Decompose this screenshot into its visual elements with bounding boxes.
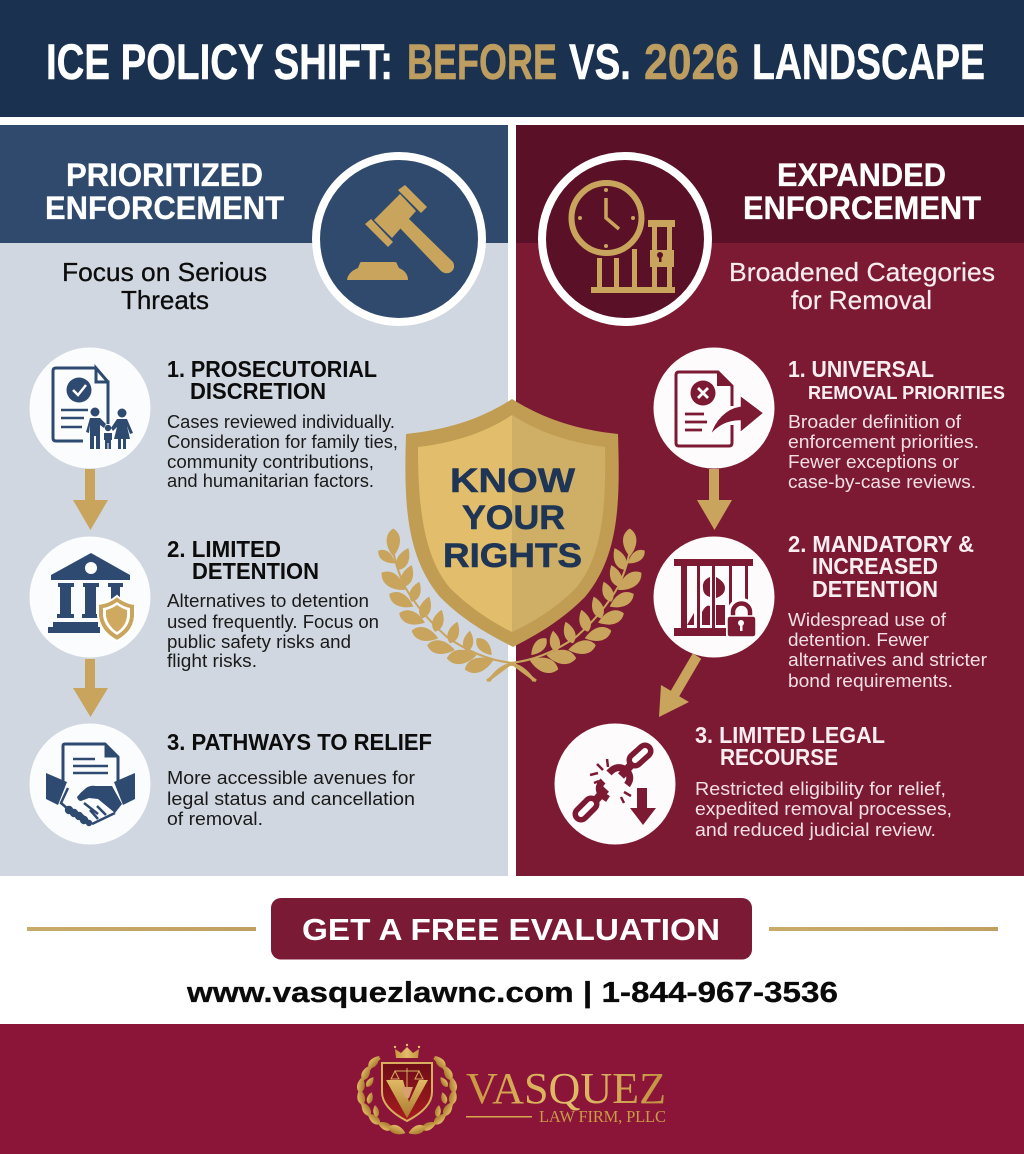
body text: alternatives and stricter <box>788 649 987 670</box>
body text: Consideration for family ties, <box>167 431 398 452</box>
heading: prioritized enforcement: PRIORITIZED <box>66 157 263 193</box>
icon: document and family <box>30 348 150 468</box>
heading: expanded enforcement <box>743 157 981 226</box>
body text: used frequently. Focus on <box>167 611 379 632</box>
body text: detention. Fewer <box>788 629 929 650</box>
icon: rejected document with arrow <box>654 348 774 468</box>
heading <box>167 356 377 404</box>
heading: 1. UNIVERSAL <box>788 356 934 382</box>
body text <box>695 778 952 840</box>
body text <box>788 609 987 691</box>
heading <box>788 356 1005 403</box>
subheading: broadened categories for removal: for Removal <box>791 285 932 315</box>
step 3: limited legal recourse <box>554 722 952 844</box>
heading: 2. LIMITED <box>167 536 281 562</box>
diagonal arrow <box>659 653 701 717</box>
body text: Alternatives to detention <box>167 590 369 611</box>
body text <box>167 767 415 829</box>
body text: bond requirements. <box>788 670 953 691</box>
laurel: left branch <box>375 528 536 681</box>
body text <box>788 411 979 492</box>
subheading: broadened categories for removal: Broadened Categories <box>729 257 995 287</box>
body text <box>167 590 379 671</box>
heading: prioritized enforcement <box>45 157 284 226</box>
step 2: limited detention <box>30 536 379 671</box>
logo <box>356 1044 666 1137</box>
icon: gavel <box>316 156 482 322</box>
heading: REMOVAL PRIORITIES <box>808 382 1005 403</box>
subheading: focus on serious threats: Threats <box>121 285 209 315</box>
heading <box>788 531 974 602</box>
body text: Restricted eligibility for relief, <box>695 778 946 799</box>
logo wordmark: VASQUEZ <box>466 1064 666 1113</box>
icon: clock and detention bars <box>542 156 708 322</box>
heading: prioritized enforcement: ENFORCEMENT <box>45 190 284 226</box>
arrow <box>73 469 108 530</box>
body text: Widespread use of <box>788 609 947 630</box>
body text: More accessible avenues for <box>167 767 415 788</box>
header banner <box>0 0 1024 117</box>
shield text <box>443 462 582 575</box>
heading <box>695 722 885 770</box>
step 3: pathways to relief <box>30 724 432 844</box>
body text: public safety risks and <box>167 631 351 652</box>
title: ICE POLICY SHIFT: <box>46 34 393 90</box>
call to action <box>27 898 998 1009</box>
step 1: universal removal priorities <box>654 348 1005 492</box>
shield text: KNOW <box>450 462 576 500</box>
subheading: focus on serious threats: Focus on Serious <box>62 257 267 287</box>
body text: case-by-case reviews. <box>788 471 976 492</box>
arrow <box>697 469 732 530</box>
title: BEFORE <box>407 34 557 90</box>
body text: expedited removal processes, <box>695 798 952 819</box>
heading: RECOURSE <box>720 744 838 770</box>
shield text: RIGHTS <box>443 537 582 575</box>
heading: DETENTION <box>812 576 938 602</box>
body text: community contributions, <box>167 451 374 472</box>
body text: Fewer exceptions or <box>788 451 959 472</box>
body text: of removal. <box>167 808 263 829</box>
body text: Broader definition of <box>788 411 962 432</box>
logo wordmark: LAW FIRM, PLLC <box>539 1107 666 1126</box>
heading: 1. PROSECUTORIAL <box>167 356 377 382</box>
heading <box>167 536 319 584</box>
icon: broken chain with down arrow <box>554 724 676 844</box>
title: VS. <box>569 34 631 90</box>
heading: DETENTION <box>192 558 319 584</box>
title: 2026 <box>644 34 739 90</box>
icon: document and handshake <box>30 724 150 844</box>
body text: Cases reviewed individually. <box>167 411 395 432</box>
heading: expanded enforcement: ENFORCEMENT <box>743 190 981 226</box>
know your rights badge <box>375 399 648 681</box>
footer band <box>0 1024 1024 1154</box>
panel: expanded enforcement <box>516 125 1024 876</box>
heading: INCREASED <box>812 553 938 579</box>
heading: expanded enforcement: EXPANDED <box>777 157 946 193</box>
button <box>271 898 752 960</box>
panel: prioritized enforcement <box>0 125 508 876</box>
logo crest <box>356 1044 458 1137</box>
button: GET A FREE EVALUATION <box>302 912 720 947</box>
body text: flight risks. <box>167 650 257 671</box>
heading: 3. LIMITED LEGAL <box>695 722 885 748</box>
contact line: www.vasquezlawnc.com | 1-844-967-3536 <box>186 977 838 1009</box>
arrow <box>73 659 108 717</box>
body text <box>167 411 398 491</box>
icon: courthouse with shield <box>30 536 150 658</box>
laurel: right branch <box>487 528 648 681</box>
heading: 3. PATHWAYS TO RELIEF <box>167 729 432 755</box>
step 1: prosecutorial discretion <box>30 348 398 491</box>
step 2: mandatory and increased detention <box>654 531 987 691</box>
body text: and reduced judicial review. <box>695 819 936 840</box>
shield <box>405 399 619 647</box>
icon: jail bars with padlock <box>654 536 774 658</box>
body text: enforcement priorities. <box>788 431 979 452</box>
heading: 2. MANDATORY & <box>788 531 974 557</box>
shield text: YOUR <box>462 499 565 537</box>
subheading: focus on serious threats <box>62 257 267 315</box>
body text: and humanitarian factors. <box>167 470 374 491</box>
subheading: broadened categories for removal <box>729 257 995 315</box>
heading: DISCRETION <box>190 378 326 404</box>
title <box>46 34 985 90</box>
body text: legal status and cancellation <box>167 788 415 809</box>
